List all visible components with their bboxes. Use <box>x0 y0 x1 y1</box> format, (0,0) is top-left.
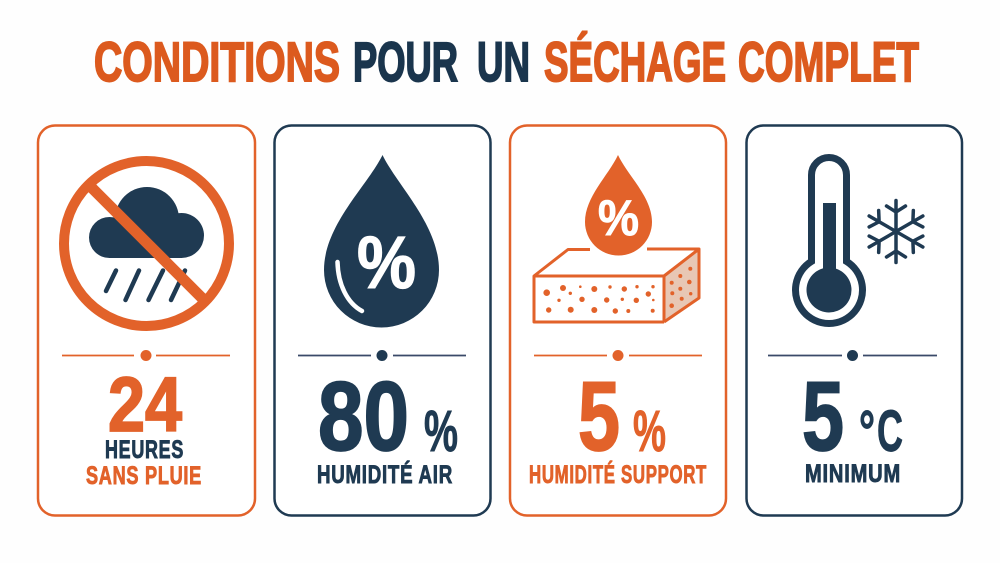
value: 80: 80 <box>318 361 409 471</box>
panel: 24 heures sans pluie <box>38 126 255 516</box>
title: SÉCHAGE <box>544 30 726 93</box>
label: minimum: MINIMUM <box>805 460 901 488</box>
value: 5: 5 <box>578 361 620 471</box>
title: UN <box>477 30 530 93</box>
icon: water drop with percent: % <box>357 221 416 304</box>
value: 5: 5 <box>802 361 844 471</box>
value: 24: 24 <box>108 362 182 448</box>
icon: snowflake <box>864 200 928 262</box>
title: POUR <box>353 30 458 93</box>
divider <box>62 350 230 361</box>
icon: thermometer <box>796 158 862 323</box>
label: humidité support: HUMIDITÉ SUPPORT <box>529 460 707 489</box>
unit: degrees celsius: ° <box>859 399 875 464</box>
unit: degrees celsius: C <box>877 399 903 464</box>
divider <box>298 350 466 361</box>
icon: no rain <box>64 161 229 326</box>
label: humidité air: HUMIDITÉ AIR <box>317 460 453 489</box>
panel: 80 % humidité air <box>274 126 490 516</box>
icon: drop above porous brick: % <box>598 190 639 246</box>
divider <box>534 350 702 361</box>
panel: 5 % humidité support <box>510 126 726 516</box>
panel: 5 °C minimum <box>746 126 962 516</box>
unit: percent: % <box>424 399 458 464</box>
title: CONDITIONS <box>94 30 340 93</box>
label: heures: HEURES <box>105 436 184 464</box>
unit: percent: % <box>633 399 666 464</box>
icon: drop above porous brick <box>534 155 699 322</box>
unit: degrees celsius <box>859 399 903 464</box>
divider <box>768 350 937 361</box>
title <box>94 30 919 93</box>
icon: water drop with percent <box>324 155 439 328</box>
label: sans pluie: SANS PLUIE <box>86 462 202 490</box>
